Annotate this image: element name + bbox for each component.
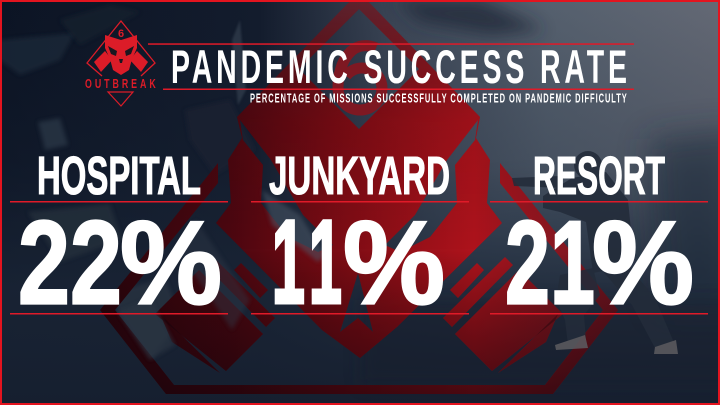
rock overlay on emblem <box>118 190 325 360</box>
logo triangle <box>108 92 133 106</box>
logo: outbreak <box>85 21 156 106</box>
junkyard value: % <box>343 196 445 330</box>
emblem shading <box>100 0 618 394</box>
junkyard value: 11 <box>272 196 342 328</box>
junkyard rule top <box>251 201 469 202</box>
rocks <box>0 5 255 360</box>
junkyard rule bottom <box>251 313 469 314</box>
hospital value: 22 <box>18 196 122 330</box>
hospital rule bottom <box>10 313 228 314</box>
logo skull mask <box>94 35 148 75</box>
emblem fill <box>100 0 618 394</box>
subtitle: PERCENTAGE OF MISSIONS SUCCESSFULLY COMPLETED ON PANDEMIC DIFFICULTY <box>250 93 627 106</box>
column: resort <box>490 146 708 330</box>
title rule top <box>148 43 634 45</box>
title: PANDEMIC SUCCESS RATE <box>171 42 627 94</box>
junkyard value <box>272 196 445 330</box>
logo diamond outline <box>87 21 155 76</box>
logo wordmark: OUTBREAK <box>85 77 156 92</box>
junkyard heading: JUNKYARD <box>269 146 450 206</box>
column: hospital <box>10 146 228 330</box>
logo skull eyes <box>108 46 134 63</box>
soldier silhouette <box>512 151 678 354</box>
hospital heading: HOSPITAL <box>37 146 201 206</box>
column: junkyard <box>251 146 469 330</box>
resort rule bottom <box>490 313 708 314</box>
resort value: 21 <box>505 196 595 330</box>
hospital rule top <box>10 201 228 202</box>
title rule bottom <box>163 88 634 90</box>
hospital value: % <box>120 196 222 330</box>
resort rule top <box>490 201 708 202</box>
hospital value <box>18 196 222 330</box>
logo six: 6 <box>118 28 124 40</box>
large red emblem <box>100 0 618 394</box>
emblem six <box>338 46 382 110</box>
resort value: % <box>592 196 694 330</box>
